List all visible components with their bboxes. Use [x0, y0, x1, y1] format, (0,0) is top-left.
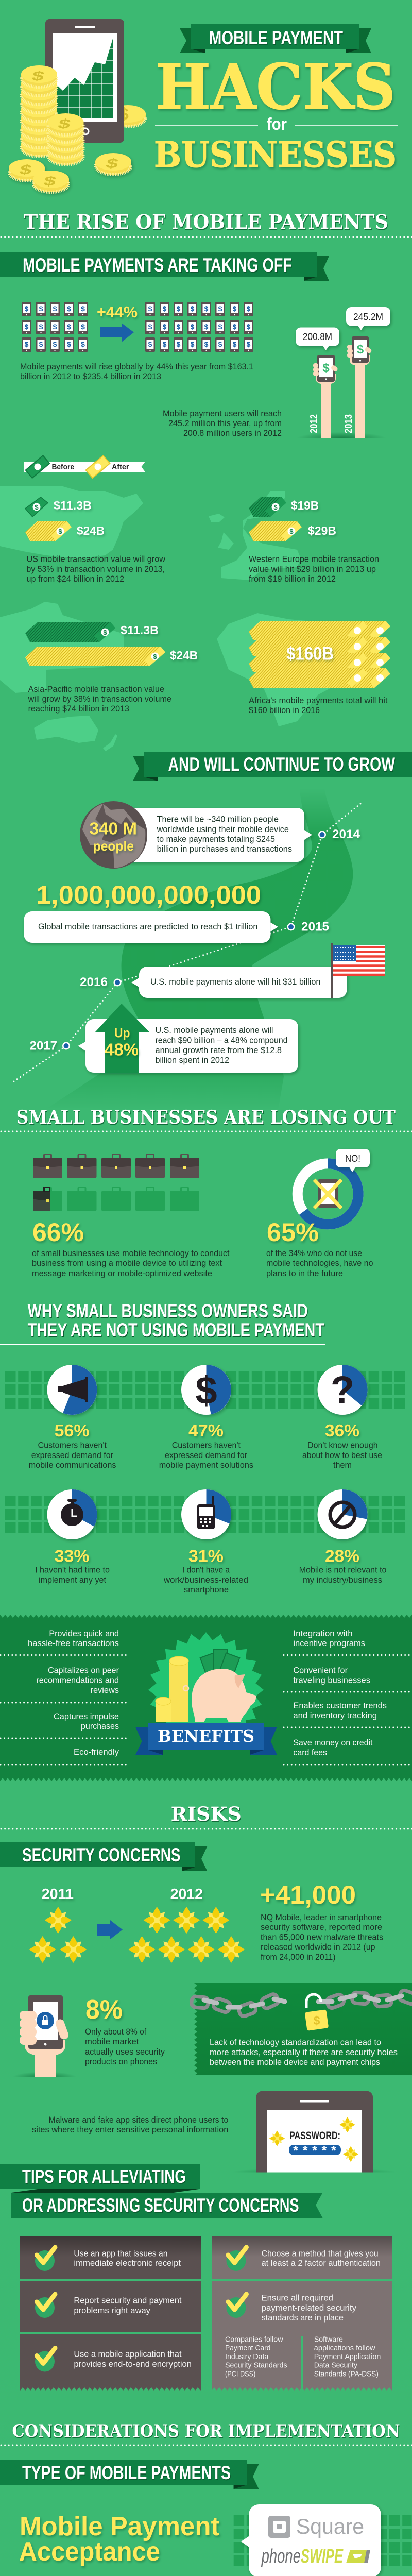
- reason 31%: 31%: [188, 1546, 224, 1565]
- tablet with password: *****: [293, 2143, 337, 2158]
- hand 2013: $: [357, 343, 364, 357]
- legend: before and after: Before: [52, 463, 74, 471]
- stat 66%: message marketing or mobile-optimized website: [32, 1269, 212, 1278]
- hero illustration: phone and coins: $: [119, 105, 129, 123]
- reason 36%: [302, 1421, 382, 1470]
- timeline 2017: billion spent in 2012: [156, 1056, 229, 1065]
- panel: US transactions: by 53% in transaction volume in 2013,: [27, 565, 165, 574]
- coin stacks: [156, 1656, 188, 1722]
- text: users: Mobile payment users will reach: [163, 409, 282, 418]
- tip: standards: Standards (PA-DSS): [314, 2370, 379, 2378]
- phone grid chart 163.1B: $$$$$: [25, 304, 85, 313]
- panel: US transactions: up from $24 billion in 2012: [27, 574, 124, 584]
- reason 33%: 33%: [55, 1546, 90, 1565]
- timeline 2014: to make payments totaling $245: [157, 835, 275, 844]
- money bills: [200, 1650, 239, 1675]
- loose coins: $: [18, 162, 33, 177]
- broken chain: [191, 1989, 412, 2018]
- panel: Western Europe transactions: [249, 497, 379, 584]
- coin stack short: [47, 113, 83, 165]
- tip: standards: Companies follow: [225, 2335, 283, 2344]
- reason 28%: my industry/business: [303, 1575, 382, 1585]
- benefits ribbon: BENEFITS: [158, 1726, 254, 1746]
- timeline 2017: 2017: [30, 1039, 57, 1053]
- panel: Asia-Pacific transactions: Asia-Pacific mobile transaction value: [28, 685, 164, 694]
- benefits right list: card fees: [293, 1748, 327, 1757]
- reason 47%: Customers haven't: [172, 1440, 241, 1450]
- ribbon: tips for alleviating: OR ADDRESSING SECURITY CONCERNS: [22, 2195, 299, 2216]
- panel: US transactions: US mobile transaction value will grow: [27, 554, 165, 564]
- coin stack tall: [21, 65, 57, 157]
- phone grid chart 163.1B: [22, 302, 88, 352]
- panel: Africa payments: [249, 621, 390, 715]
- loose coins: $: [104, 156, 120, 171]
- tip: report: problems right away: [74, 2306, 151, 2315]
- reason 31%: [163, 1546, 248, 1595]
- hero illustration: phone and coins: [9, 19, 146, 192]
- panel: US transactions: $24B: [77, 524, 105, 537]
- reason 56%: 56%: [55, 1421, 90, 1440]
- tips panels: [20, 2236, 392, 2391]
- donut chart 65%: [298, 1149, 370, 1224]
- piggy: [183, 1669, 256, 1722]
- stat +41,000: [260, 1880, 383, 1962]
- pie 56%: [47, 1365, 97, 1415]
- tip: standards: Payment Application: [314, 2353, 381, 2361]
- coin stack short: $: [56, 116, 72, 131]
- title ribbon: MOBILE PAYMENT: [209, 27, 343, 48]
- reason 28%: 28%: [325, 1546, 359, 1565]
- text: malware and fake app sites: [32, 2115, 228, 2134]
- reason 28%: Mobile is not relevant to: [299, 1565, 386, 1574]
- reason 56%: mobile communications: [29, 1461, 116, 1470]
- ribbon: tips for alleviating: [0, 2164, 322, 2218]
- benefits right list: [293, 1629, 387, 1757]
- stat 65%: plans to in the future: [266, 1269, 343, 1278]
- heading: why small business owners said: [0, 1300, 325, 1345]
- reason 31%: smartphone: [184, 1585, 229, 1595]
- text: users: 245.2 million this year, up from: [168, 419, 282, 428]
- logo: phoneswipe: [261, 2546, 370, 2567]
- stat 65%: of the 34% who do not use: [266, 1249, 362, 1258]
- reason 33%: I haven't had time to: [35, 1565, 110, 1574]
- stat 65%: [266, 1218, 373, 1278]
- tip: receipt: [20, 2236, 201, 2279]
- stat 66%: business from using a mobile device to utilizing text: [32, 1259, 222, 1268]
- hand 2012: 2012: [308, 414, 320, 433]
- tip: standards: (PCI DSS): [225, 2370, 255, 2378]
- icon: cell phone: [197, 1496, 215, 1529]
- tip: 2 factor: at least a 2 factor authentication: [262, 2259, 381, 2268]
- stat +41,000: released worldwide in 2012 (up: [261, 1942, 375, 1952]
- panel: Western Europe transactions: from $19 billion in 2012: [249, 574, 336, 584]
- stat 66%: 66%: [32, 1218, 84, 1247]
- reason 28%: [299, 1546, 386, 1585]
- burst with piggy bank: [148, 1632, 264, 1748]
- ribbon: mobile payments are taking off: MOBILE PAYMENTS ARE TAKING OFF: [23, 255, 292, 276]
- stat +41,000: +41,000: [260, 1880, 356, 1909]
- pie 47%: [181, 1365, 231, 1415]
- stat +41,000: security software, reported more: [261, 1923, 382, 1932]
- ribbon: tips for alleviating: TIPS FOR ALLEVIATING: [22, 2166, 186, 2187]
- stat 65%: mobile technologies, have no: [266, 1259, 373, 1268]
- benefits right list: Save money on credit: [293, 1738, 373, 1748]
- for: for: [267, 114, 287, 133]
- timeline swoosh: [47, 788, 353, 1110]
- benefits left list: hassle-free transactions: [28, 1639, 119, 1648]
- stat 8%: Only about 8% of: [85, 2027, 146, 2037]
- timeline 2014: There will be ~340 million people: [157, 815, 279, 824]
- panel: Asia-Pacific transactions: $24B: [170, 649, 198, 662]
- panel: Western Europe transactions: value will hit $29 billion in 2013 up: [249, 565, 376, 574]
- heading: mobile payment acceptance: Acceptance: [19, 2537, 160, 2567]
- panel: Western Europe transactions: $: [273, 503, 278, 511]
- reason 56%: Customers haven't: [38, 1440, 107, 1450]
- timeline 2015: Global mobile transactions are predicted to reach $1 trillion: [38, 922, 258, 931]
- reason 36%: 36%: [325, 1421, 359, 1440]
- pie 36%: [317, 1365, 368, 1415]
- logo: phoneswipe: SWIPE: [301, 2546, 344, 2567]
- tip: standards: [212, 2281, 392, 2391]
- tip: report: Report security and payment: [74, 2296, 182, 2306]
- node 2014: [318, 831, 326, 839]
- reason 33%: [35, 1546, 110, 1585]
- reason 36%: Don't know enough: [307, 1440, 378, 1450]
- phone grid chart 235.4B: [145, 302, 253, 352]
- timeline 2015: 1,000,000,000,000: [36, 880, 261, 909]
- tip: standards: Ensure all required: [262, 2294, 333, 2303]
- timeline 2015: [24, 880, 329, 943]
- panel: US transactions: $: [58, 528, 62, 535]
- ribbon: security concerns: SECURITY CONCERNS: [22, 1844, 180, 1866]
- before bill icon: [26, 455, 49, 478]
- pie 33%: [47, 1489, 97, 1539]
- panel: Asia-Pacific transactions: [25, 622, 198, 714]
- panel: Africa payments: $160 billion in 2016: [249, 706, 320, 715]
- timeline 2017: annual growth rate from the $12.8: [156, 1046, 282, 1055]
- timeline 2014: people: [93, 838, 134, 854]
- stat 66%: [32, 1218, 230, 1278]
- phone grid chart 163.1B: $$$$$: [25, 340, 85, 348]
- phone grid chart 235.4B: $$$$$$$$: [148, 304, 251, 313]
- panel: technology standardization: [191, 1983, 412, 2075]
- tip: report: [20, 2281, 201, 2332]
- benefits left list: recommendations and: [36, 1675, 119, 1685]
- phone grid chart 163.1B: $$$$$: [25, 323, 85, 331]
- tip: standards: applications follow: [314, 2344, 375, 2352]
- hand 2013: 2013: [343, 414, 354, 433]
- loose coins: [9, 153, 131, 192]
- stat +41,000: than 65,000 new malware threats: [261, 1933, 383, 1942]
- node 2015: [287, 923, 295, 930]
- tip: receipt: immediate electronic receipt: [74, 2259, 181, 2268]
- tip: receipt: Use an app that issues an: [74, 2249, 168, 2258]
- ribbon: type of mobile payments: TYPE OF MOBILE PAYMENTS: [22, 2462, 231, 2483]
- timeline 2016: U.S. mobile payments alone will hit $31 billion: [150, 977, 320, 987]
- timeline 2017: Up: [114, 1026, 130, 1041]
- panel: technology standardization: between the mobile device and payment chips: [210, 2058, 380, 2067]
- hand 2013: [343, 336, 372, 438]
- world map: [0, 486, 368, 751]
- timeline 2016: [80, 943, 385, 998]
- loose coins: $: [42, 174, 58, 189]
- benefits left list: Eco-friendly: [74, 1748, 119, 1757]
- benefits left list: [28, 1629, 119, 1757]
- reason 36%: about how to best use: [302, 1451, 382, 1460]
- timeline 2014: [80, 801, 360, 869]
- phone grid chart 235.4B: $$$$$$$$: [148, 340, 251, 348]
- panel: Asia-Pacific transactions: $11.3B: [121, 623, 159, 637]
- stat 8%: 8%: [85, 1995, 123, 2025]
- panel: Asia-Pacific transactions: will grow by 38% in transaction volume: [28, 694, 171, 704]
- legend: before and after: [24, 455, 145, 478]
- text: users: 200.8 million users in 2012: [183, 429, 282, 438]
- reasons row 2: [35, 1489, 386, 1595]
- hand 2012: [308, 355, 338, 438]
- panel: Asia-Pacific transactions: $: [103, 629, 107, 636]
- bubble 2015: [24, 911, 278, 943]
- text: malware and fake app sites: Malware and fake app sites direct phone users to: [48, 2115, 228, 2125]
- decorative grid bands: [5, 1371, 407, 1409]
- reason 36%: them: [333, 1461, 352, 1470]
- timeline 2014: billion in purchases and transactions: [157, 844, 292, 854]
- stat 8%: mobile market: [85, 2037, 139, 2046]
- text: global rise: [20, 362, 253, 381]
- text: users: [163, 409, 282, 438]
- panel: technology standardization: Lack of technology standardization can lead to: [210, 2038, 381, 2047]
- panel: US transactions: [25, 497, 165, 584]
- timeline 2017: 48%: [105, 1040, 139, 1059]
- heading: mobile payment acceptance: Mobile Payment: [20, 2512, 219, 2541]
- bubble: square and phoneswipe logos: [241, 2504, 381, 2576]
- logo: square: [268, 2514, 364, 2538]
- section heading: risks: RISKS: [171, 1803, 242, 1825]
- icon: prohibited: [330, 1502, 355, 1527]
- benefits right list: Enables customer trends: [293, 1701, 387, 1710]
- bubble 245.2M: 245.2M: [353, 312, 383, 323]
- tip: standards: Software: [314, 2335, 343, 2344]
- timeline 2014: worldwide using their mobile device: [157, 825, 289, 834]
- globe: [80, 801, 147, 869]
- tip: encryption: [20, 2334, 201, 2391]
- reason 47%: 47%: [188, 1421, 224, 1440]
- hand 2012: $: [322, 361, 330, 375]
- node 2017: [62, 1042, 70, 1050]
- briefcase chart 66%: [33, 1154, 199, 1211]
- icon: stopwatch: [61, 1499, 83, 1526]
- panel: Western Europe transactions: $: [289, 528, 294, 535]
- section heading: the rise of mobile payments: THE RISE OF MOBILE PAYMENTS: [24, 210, 388, 233]
- malware chart 2011: 2011: [42, 1886, 74, 1903]
- tip: standards: payment-related security: [262, 2303, 357, 2313]
- icon: megaphone: [58, 1377, 88, 1402]
- legend: before and after: After: [112, 463, 129, 471]
- benefits right list: Convenient for: [293, 1666, 348, 1675]
- node 2016: [113, 979, 122, 986]
- reason 56%: expressed demand for: [31, 1451, 113, 1460]
- tip: standards: standards are in place: [262, 2313, 344, 2323]
- ribbon: security concerns: [0, 1842, 207, 1871]
- pie 28%: [317, 1489, 368, 1539]
- tip: standards: Data Security: [314, 2362, 358, 2370]
- stat 8%: products on phones: [85, 2057, 157, 2066]
- ribbon: and will continue to grow: [133, 752, 412, 781]
- bubble 245.2M: [346, 307, 390, 330]
- logo: phoneswipe: phone: [261, 2546, 301, 2567]
- panel: Western Europe transactions: Western Europe mobile transaction: [249, 554, 379, 564]
- benefits left list: Captures impulse: [54, 1712, 119, 1721]
- crossed phone: [314, 1179, 341, 1208]
- benefits right list: Integration with: [293, 1629, 353, 1638]
- icon: question mark: ?: [331, 1368, 354, 1412]
- text: global rise: Mobile payments will rise globally by 44% this year from $163.1: [20, 362, 253, 371]
- bubble 2014: [124, 808, 312, 862]
- benefits left list: Capitalizes on peer: [48, 1666, 119, 1675]
- reason 33%: implement any yet: [39, 1575, 106, 1585]
- US flag: [331, 943, 385, 998]
- benefits ribbon: [135, 1723, 277, 1755]
- panel: Asia-Pacific transactions: $: [153, 653, 157, 660]
- benefits right list: traveling businesses: [293, 1675, 370, 1685]
- ribbon: mobile payments are taking off: [0, 252, 329, 281]
- logo: square: Square: [296, 2514, 364, 2538]
- icon: hand holding secure phone: [12, 1995, 77, 2077]
- panel: US transactions: $11.3B: [54, 499, 92, 512]
- bubble NO: [336, 1149, 370, 1172]
- icon: dollar: $: [195, 1369, 217, 1413]
- malware chart 2012: 2012: [170, 1886, 203, 1903]
- stat 8%: [85, 1995, 165, 2066]
- timeline 2017: reach $90 billion – a 48% compound: [156, 1036, 287, 1045]
- reason 56%: [29, 1421, 116, 1470]
- title ribbon: [180, 24, 371, 53]
- bubble 200.8M: [296, 328, 339, 350]
- tip: 2 factor: Choose a method that gives you: [262, 2249, 379, 2258]
- reason 47%: mobile payment solutions: [159, 1461, 253, 1470]
- panel: Western Europe transactions: $29B: [308, 524, 336, 537]
- panel: technology standardization: more attacks, especially if there are security holes: [210, 2048, 398, 2057]
- stat 8%: actually uses security: [85, 2047, 165, 2057]
- reason 47%: [159, 1421, 253, 1470]
- heading: mobile payment acceptance: [19, 2512, 219, 2567]
- tip: 2 factor: [212, 2236, 392, 2279]
- timeline 2014: 340 M: [90, 819, 137, 838]
- HACKS: HACKS: [156, 50, 396, 124]
- pie 31%: [181, 1489, 231, 1539]
- benefits left list: Provides quick and: [49, 1629, 119, 1638]
- malware chart 2011: [29, 1886, 87, 1963]
- timeline 2017: [30, 1004, 298, 1073]
- bubble 2016: [131, 967, 347, 998]
- tip: standards: Industry Data: [225, 2353, 269, 2361]
- panel: Africa payments: $160B: [286, 644, 334, 664]
- bubble 200.8M: 200.8M: [303, 332, 332, 343]
- phone grid chart 235.4B: $$$$$$$$: [148, 323, 251, 331]
- decorative grid: [234, 2515, 412, 2567]
- stat +41,000: from 24,000 in 2011): [261, 1953, 336, 1962]
- stat 66%: of small businesses use mobile technology to conduct: [32, 1249, 230, 1258]
- stat 65%: 65%: [267, 1218, 319, 1247]
- hands holding phones chart: [296, 307, 390, 438]
- up arrow: [95, 1004, 150, 1073]
- timeline 2016: 2016: [80, 975, 108, 989]
- panel: benefits: [0, 1615, 412, 1781]
- panel: Western Europe transactions: $19B: [291, 499, 319, 512]
- open padlock: $: [314, 2014, 320, 2027]
- tip: standards: Security Standards: [225, 2362, 287, 2370]
- reason 31%: I don't have a: [182, 1565, 230, 1574]
- text: malware and fake app sites: sites where they enter sensitive personal information: [32, 2125, 228, 2134]
- stat +41,000: NQ Mobile, leader in smartphone: [261, 1913, 382, 1922]
- benefits left list: reviews: [91, 1686, 119, 1695]
- tip: encryption: provides end-to-end encryption: [74, 2360, 192, 2369]
- bubble NO: NO!: [345, 1154, 360, 1164]
- timeline 2014: 2014: [332, 827, 360, 841]
- tablet with password: [232, 2091, 397, 2172]
- reason 47%: expressed demand for: [165, 1451, 247, 1460]
- growth arrow +44%: [97, 303, 138, 342]
- coin stack tall: $: [30, 69, 46, 83]
- open padlock: [305, 1994, 329, 2031]
- heading: why small business owners said: WHY SMALL BUSINESS OWNERS SAID: [28, 1300, 308, 1321]
- panel: US transactions: $: [35, 503, 39, 511]
- panel: Africa payments: Africa's mobile payments total will hit: [249, 696, 388, 705]
- timeline dotted path: [13, 804, 360, 1082]
- benefits left list: purchases: [81, 1722, 119, 1731]
- reasons row 1: [29, 1365, 382, 1470]
- phone with rising chart: [45, 19, 124, 143]
- timeline 2017: U.S. mobile payments alone will: [156, 1026, 273, 1035]
- tip: encryption: Use a mobile application that: [74, 2349, 182, 2359]
- growth arrow +44%: +44%: [97, 303, 138, 321]
- ribbon: type of mobile payments: [0, 2460, 259, 2489]
- heading: why small business owners said: THEY ARE NOT USING MOBILE PAYMENT: [28, 1319, 324, 1341]
- text: global rise: billion in 2012 to $235.4 billion in 2013: [20, 372, 161, 381]
- benefits right list: and inventory tracking: [293, 1711, 377, 1720]
- malware chart 2012: [129, 1886, 245, 1963]
- benefits right list: incentive programs: [293, 1639, 365, 1648]
- bubble 2017: [78, 1019, 298, 1073]
- title: [154, 24, 398, 176]
- tablet with password: PASSWORD:: [289, 2130, 340, 2142]
- arrow 2011 to 2012: [97, 1920, 123, 1939]
- reason 31%: work/business-related: [163, 1575, 248, 1585]
- timeline 2015: 2015: [301, 920, 329, 934]
- panel: Asia-Pacific transactions: reaching $74 billion in 2013: [28, 704, 129, 714]
- BUSINESSES: BUSINESSES: [154, 134, 397, 176]
- after bill icon: [86, 455, 110, 478]
- tip: standards: Payment Card: [225, 2344, 271, 2352]
